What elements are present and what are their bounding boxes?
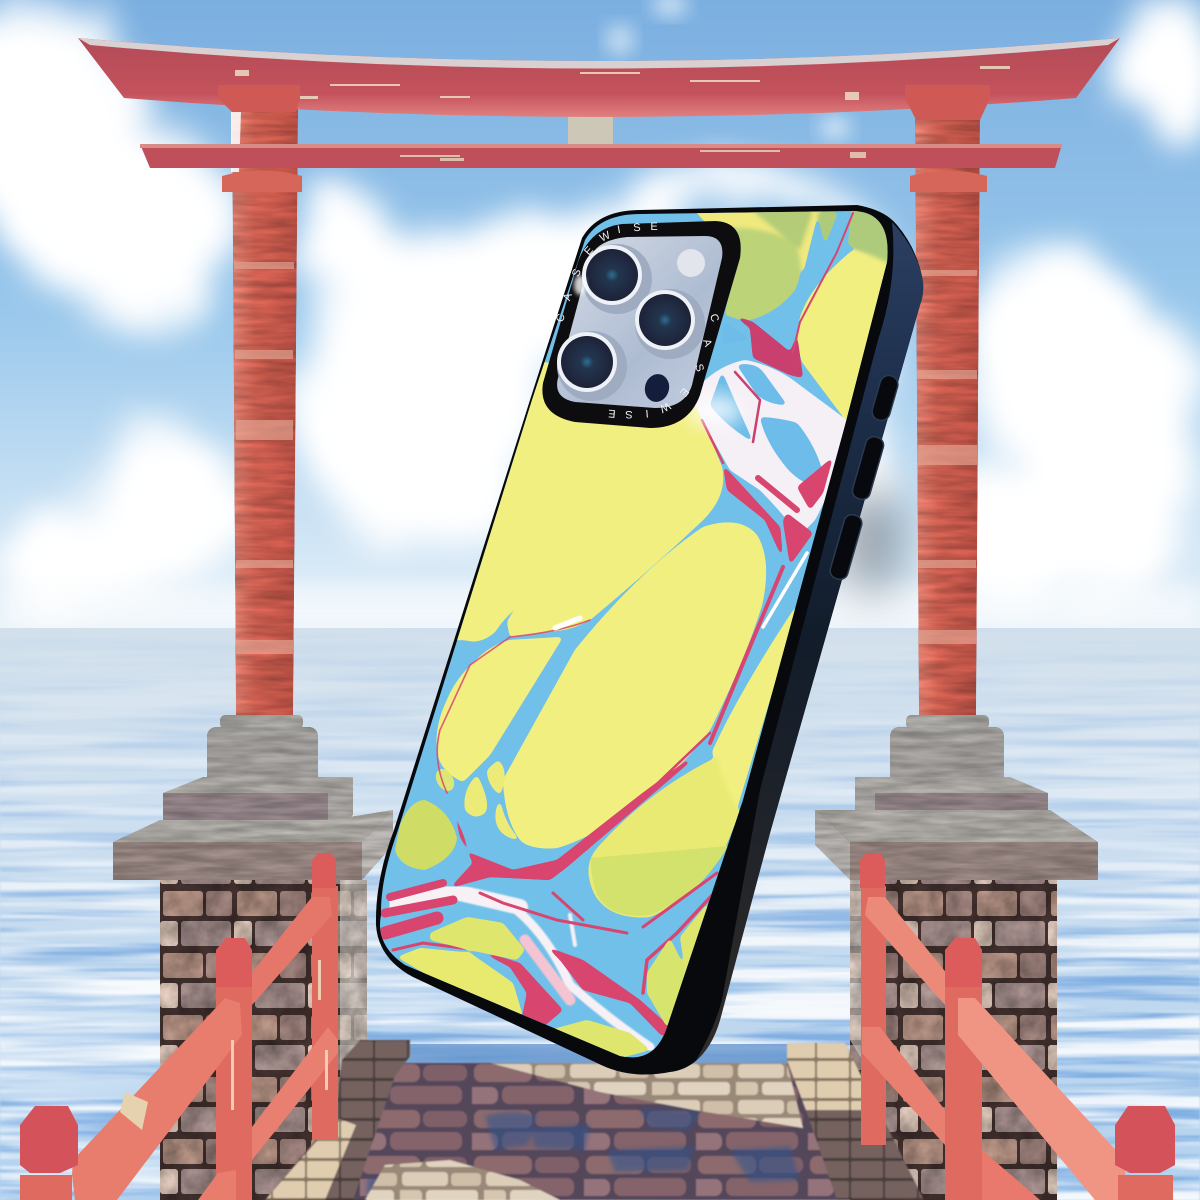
CASEWISE ring text right: I (645, 407, 649, 419)
top lobes (697, 211, 888, 421)
upper yellow lobe (450, 360, 723, 641)
magenta marbling (448, 315, 833, 1037)
CASEWISE ring text right: S (692, 363, 706, 373)
camera module (542, 221, 741, 428)
CASEWISE ring text left: S (570, 267, 584, 279)
CASEWISE ring text left: W (598, 229, 613, 245)
CASEWISE ring text right: S (625, 408, 633, 420)
sunlit cobbles (490, 1063, 803, 1128)
camera plate (557, 236, 722, 408)
sunlit patch (365, 1160, 560, 1200)
right pillar (910, 105, 987, 718)
CASEWISE ring text right: E (608, 407, 616, 419)
CASEWISE ring text right: C (707, 312, 721, 324)
right stone base (815, 715, 1098, 880)
lens three (557, 331, 627, 401)
camera bumper (542, 221, 741, 428)
lens glare (574, 275, 586, 295)
left stone base (113, 715, 393, 880)
bottom lobes (397, 900, 710, 1058)
right curb (787, 1043, 924, 1200)
case translucent side (696, 222, 923, 1060)
cloud shadow behind phone (838, 485, 902, 595)
shaded cobbles (350, 1063, 842, 1200)
CASEWISE ring text left: I (616, 224, 622, 236)
stone walkway (265, 1040, 924, 1200)
phone case body (376, 205, 923, 1075)
white upper marbling (696, 360, 846, 528)
pillar caps (218, 85, 990, 120)
flash (677, 249, 705, 277)
sea (0, 628, 1200, 1200)
large yellow lobes (437, 522, 800, 917)
CASEWISE ring text left: A (561, 291, 575, 302)
white vein glints (555, 553, 807, 628)
blue pools upper (710, 364, 821, 482)
small teardrop lobes (432, 760, 520, 840)
lens two (635, 289, 705, 359)
lower beam (140, 144, 1062, 168)
left railing (20, 853, 338, 1200)
central strut (568, 104, 613, 144)
left pillar (222, 105, 302, 718)
left curb (265, 1040, 410, 1200)
CASEWISE ring text left: S (633, 222, 641, 234)
sky background (0, 0, 1200, 630)
CASEWISE ring text right: W (657, 399, 672, 415)
left curb sunlit (265, 1118, 356, 1200)
green left lobe (395, 800, 457, 870)
puddles (366, 1108, 800, 1194)
right brick tower (850, 880, 1057, 1200)
CASEWISE ring text left: E (582, 244, 596, 258)
soft glow under camera (687, 394, 743, 426)
right railing (860, 853, 1175, 1200)
marble phone back (370, 200, 900, 1070)
CASEWISE ring text left: E (650, 221, 658, 233)
lens one (582, 244, 652, 314)
clouds (0, 0, 1200, 610)
blue ground (370, 200, 900, 1070)
CASEWISE ring text left (554, 221, 658, 324)
CASEWISE ring text right (608, 312, 721, 420)
torii gate (78, 38, 1120, 718)
white lower marbling (395, 890, 650, 1047)
microphone sensor (642, 371, 672, 405)
left brick tower (160, 880, 367, 1200)
magenta strands (385, 213, 853, 993)
lower right lobe green shade (591, 846, 728, 916)
CASEWISE ring text left: C (554, 312, 568, 324)
thin haze clouds (0, 0, 1200, 630)
phone (370, 200, 923, 1075)
top beam (78, 38, 1120, 117)
side buttons (828, 373, 900, 581)
right curb sunlit (787, 1043, 878, 1110)
CASEWISE ring text right: E (677, 385, 691, 399)
CASEWISE ring text right: A (700, 338, 714, 349)
